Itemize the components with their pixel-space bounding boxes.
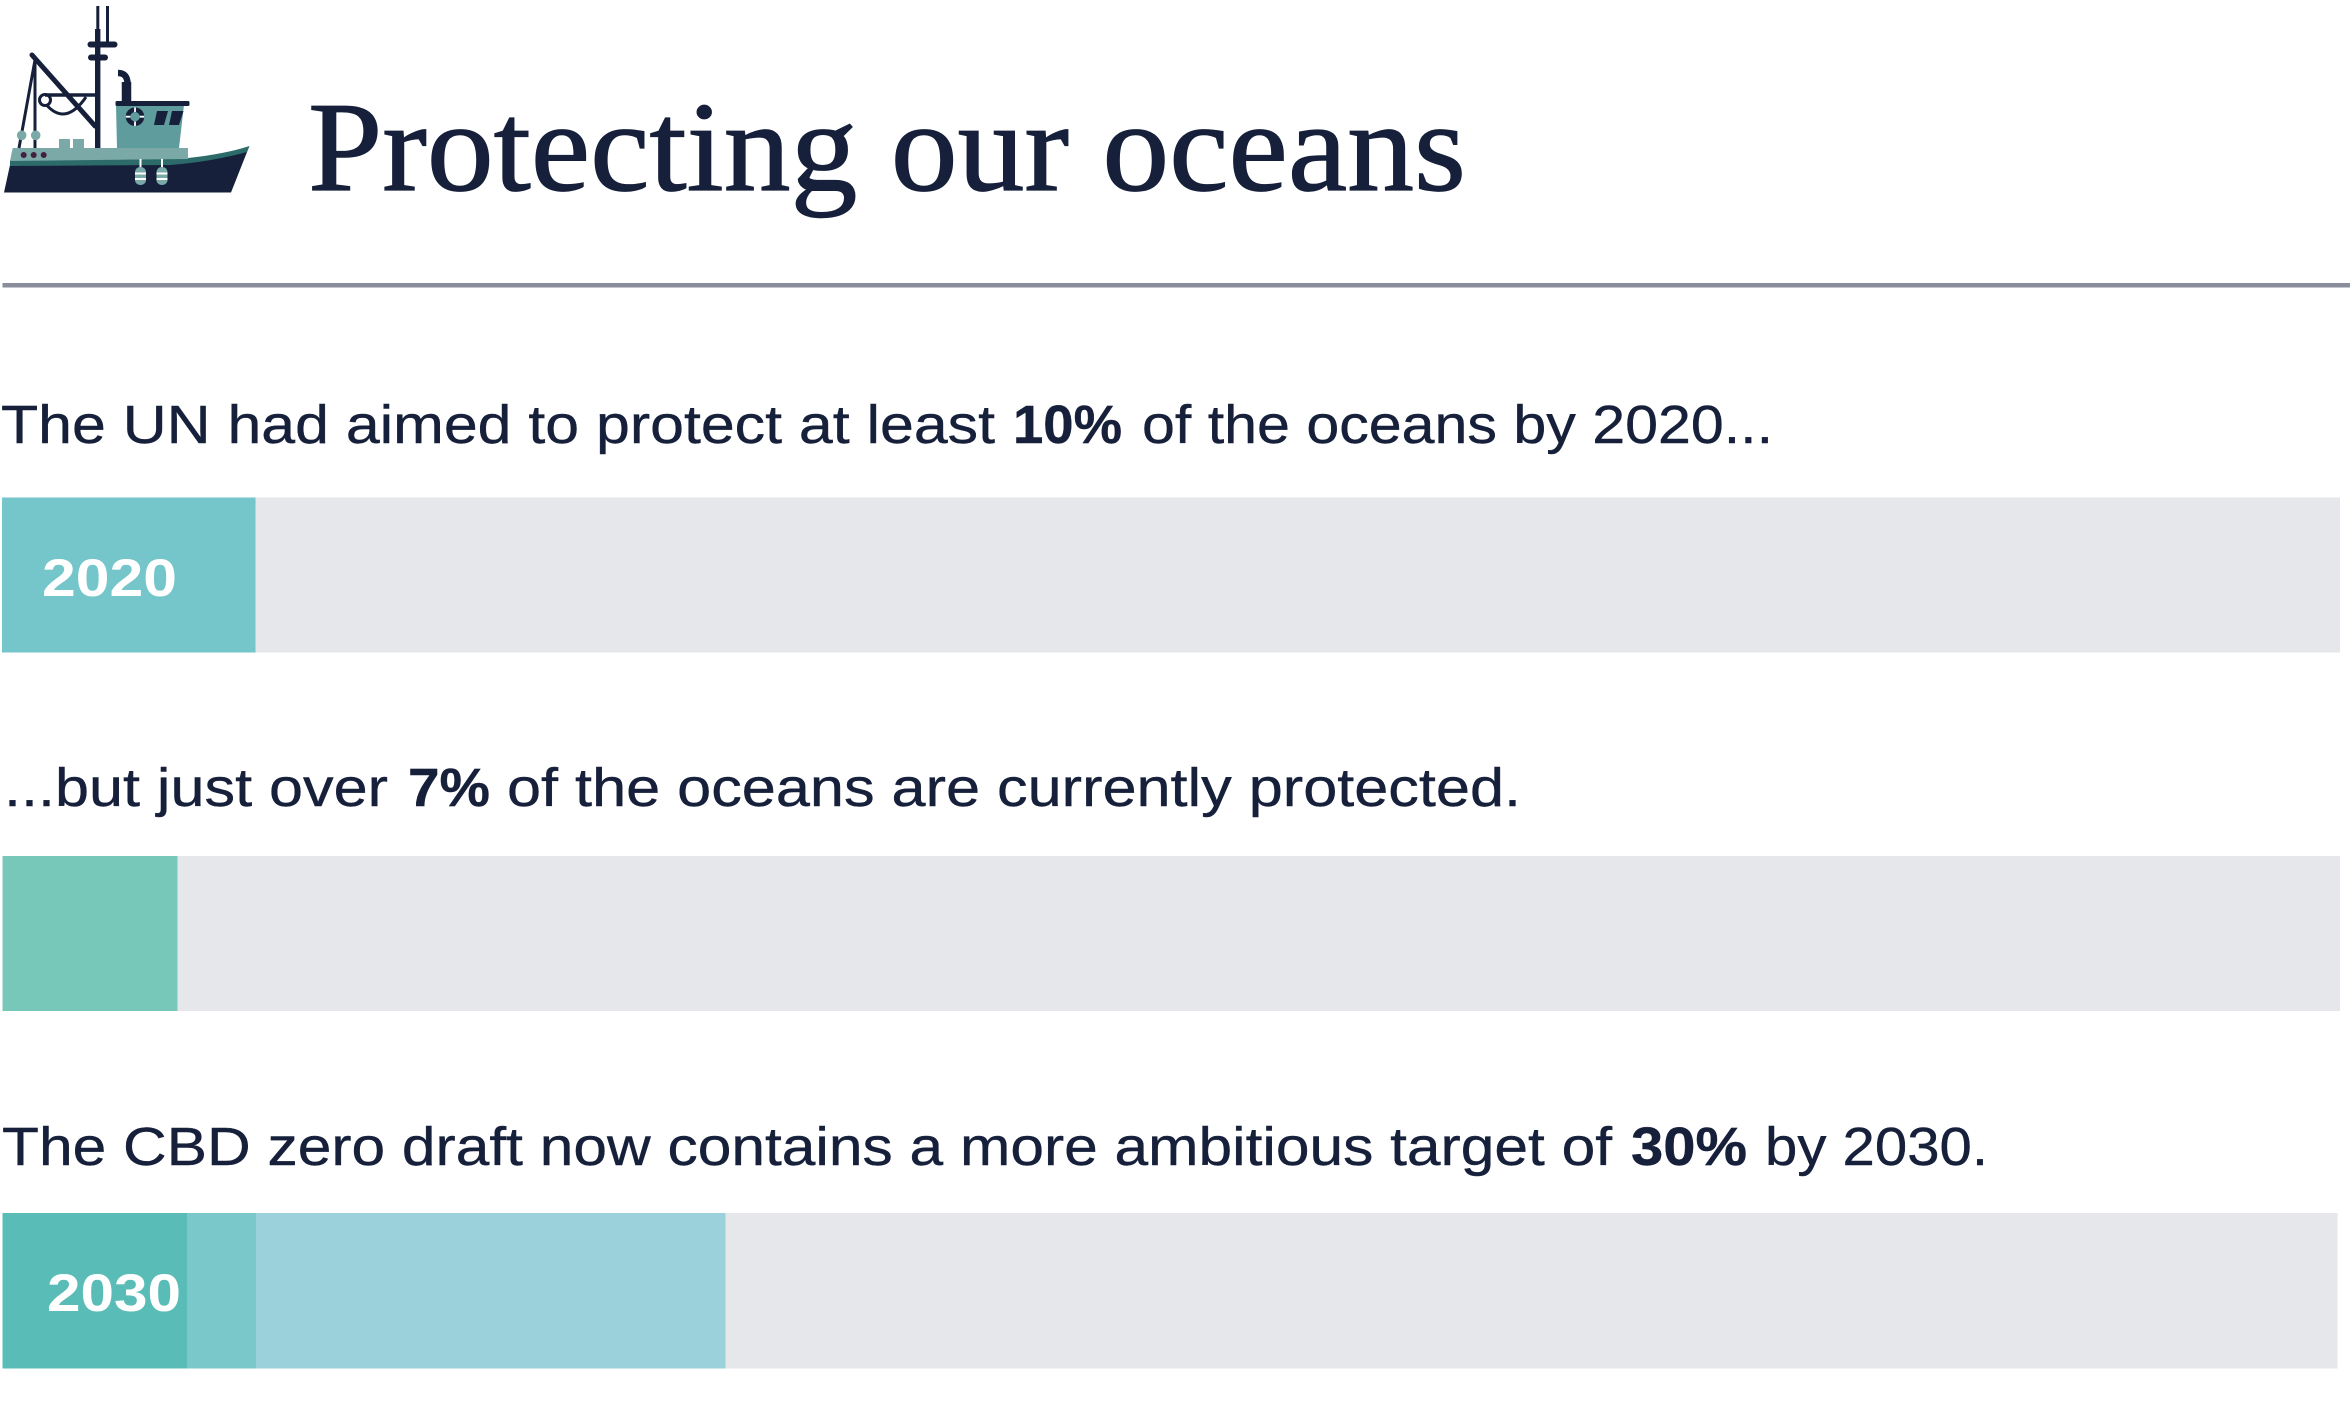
boat waterline band xyxy=(10,146,250,166)
bar: 2020 target: 2020 xyxy=(42,549,177,608)
bar: 2030 target xyxy=(2,1213,2338,1368)
text: current protection: of the oceans are currently protected. xyxy=(507,758,1521,818)
text: current protection xyxy=(4,758,1521,818)
bar: 2030 target: 2030 xyxy=(47,1264,181,1323)
text: 2020 aim: of the oceans by 2020... xyxy=(1142,395,1773,455)
text: 2020 aim xyxy=(1,395,1773,455)
icon: fishing boat xyxy=(4,6,250,192)
boat mast xyxy=(88,6,118,148)
text: 2030 target: The CBD zero draft now contains a more ambitious target of xyxy=(2,1117,1613,1177)
boat floats and crates xyxy=(17,130,84,148)
boat chimney xyxy=(118,73,128,102)
boat cabin xyxy=(116,105,184,148)
boat crane and rigging xyxy=(19,55,96,148)
boat cabin roof xyxy=(116,101,190,106)
text: 2020 aim: 10% xyxy=(1013,395,1122,455)
boat deck xyxy=(10,148,188,161)
text: 2030 target: by 2030. xyxy=(1765,1117,1988,1177)
bar: currently protected xyxy=(2,856,2340,1011)
boat hull xyxy=(4,147,249,192)
boat deck portholes xyxy=(21,152,47,158)
title: Protecting our oceans xyxy=(308,76,1466,218)
text: current protection: ...but just over xyxy=(4,758,388,818)
boat fenders xyxy=(135,159,168,185)
boat lifebuoy xyxy=(126,108,144,126)
boat windows xyxy=(154,111,184,125)
text: 2030 target: 30% xyxy=(1631,1117,1747,1177)
text: 2020 aim: The UN had aimed to protect at least xyxy=(1,395,995,455)
bar: 2020 target xyxy=(2,498,2340,652)
text: current protection: 7% xyxy=(408,758,490,818)
